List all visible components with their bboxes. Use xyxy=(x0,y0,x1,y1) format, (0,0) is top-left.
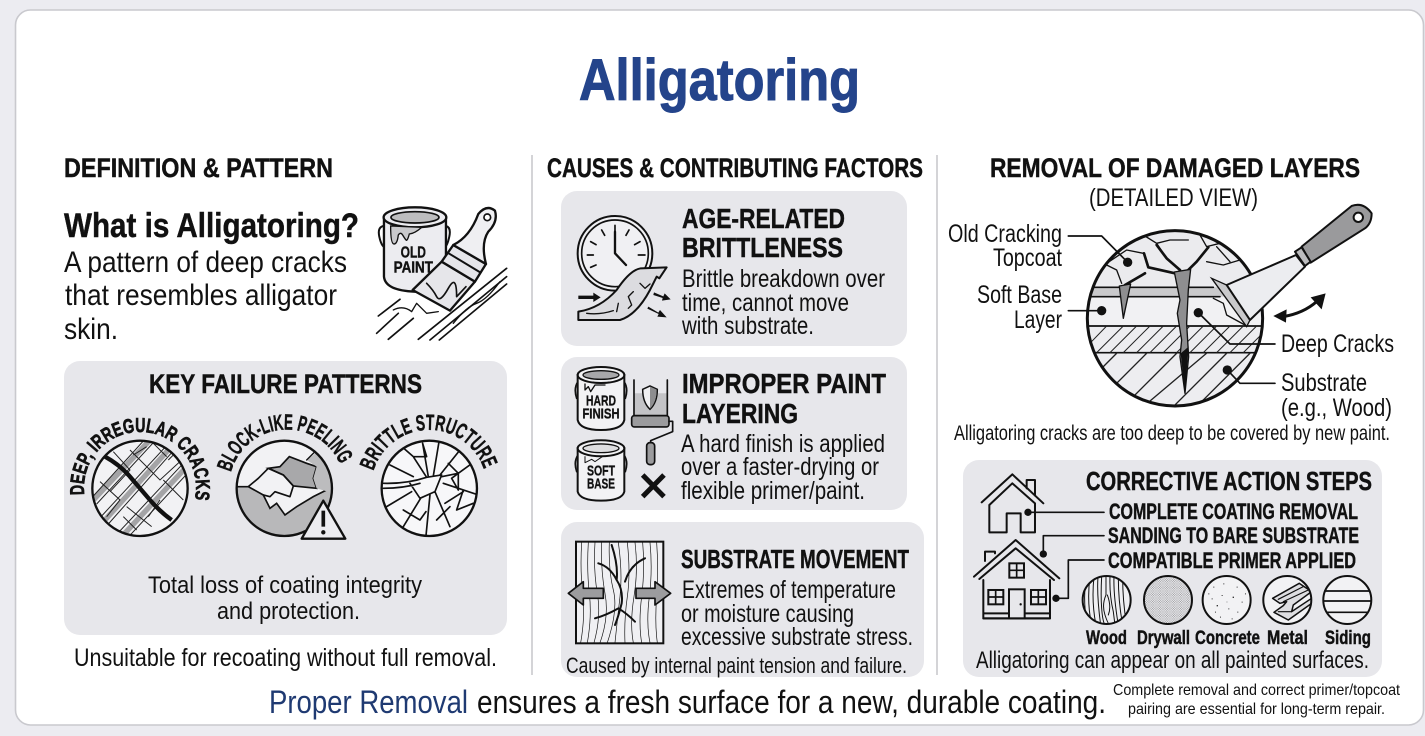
icon: scraper tool xyxy=(1227,205,1372,320)
icon: hard finish and soft base cans with roller: SOFT xyxy=(587,464,615,480)
surface material labels: Siding xyxy=(1325,628,1371,649)
icon: old paint can and brush: PAINT xyxy=(394,259,434,276)
heading: removal of damaged layers: REMOVAL OF DAMAGED LAYERS xyxy=(990,153,1360,183)
footer small note: Complete removal and correct primer/topcoat xyxy=(1113,682,1400,699)
icon: deep irregular cracks circle xyxy=(92,437,190,541)
curved label: block-like peeling: BLOCK-LIKE PEELING xyxy=(216,414,352,472)
diagram: cross-section of cracks and scraper xyxy=(1068,205,1372,410)
heading: key failure patterns: KEY FAILURE PATTERNS xyxy=(149,369,422,399)
icon: siding xyxy=(1322,576,1373,624)
title: Alligatoring xyxy=(579,48,860,113)
curved label: brittle structure: BRITTLE STRUCTURE xyxy=(359,414,498,470)
definition text block: skin. xyxy=(64,313,118,346)
description: age-related brittleness: Brittle breakdown over xyxy=(682,265,885,293)
surface material labels: Drywall xyxy=(1137,628,1190,649)
note: caused by internal paint tension: Caused by internal paint tension and failure. xyxy=(566,653,907,678)
diagram labels: Topcoat xyxy=(993,244,1062,272)
icon: houses with connector lines xyxy=(974,474,1104,618)
panel: improper paint layering xyxy=(561,357,907,510)
panel: key failure patterns xyxy=(64,361,507,635)
heading: age-related brittleness: BRITTLENESS xyxy=(682,232,843,263)
icon: block-like peeling circle xyxy=(235,440,345,540)
panel: corrective action steps xyxy=(963,460,1382,677)
icon: drywall xyxy=(1144,576,1192,624)
diagram labels: Substrate xyxy=(1281,369,1367,397)
heading: improper paint layering: IMPROPER PAINT xyxy=(682,368,886,399)
diagram labels: Deep Cracks xyxy=(1281,330,1394,358)
column: definition and pattern xyxy=(64,153,507,346)
icon: concrete xyxy=(1203,576,1251,624)
surface material labels: Wood xyxy=(1086,628,1127,649)
curved label: deep irregular cracks: DEEP, IRREGULAR CRACKS xyxy=(70,418,210,500)
heading: age-related brittleness xyxy=(682,203,845,263)
icon: brittle structure circle xyxy=(382,440,478,536)
description: substrate movement: Extremes of temperature xyxy=(682,576,896,604)
description: improper paint layering: A hard finish is applied xyxy=(681,430,885,458)
icon: hard finish and soft base cans with roller xyxy=(575,367,673,501)
surface material labels: Concrete xyxy=(1195,628,1260,649)
action steps list xyxy=(1108,499,1359,573)
description: substrate movement xyxy=(681,576,913,651)
surface material icons xyxy=(1083,576,1373,625)
leader lines xyxy=(1068,236,1275,383)
heading: causes and contributing factors: CAUSES & CONTRIBUTING FACTORS xyxy=(547,153,923,183)
heading: removal of damaged layers xyxy=(990,153,1360,212)
diagram labels: (e.g., Wood) xyxy=(1281,394,1392,422)
icon: metal xyxy=(1263,576,1312,624)
description: age-related brittleness: with substrate. xyxy=(681,312,814,340)
icon: wood substrate with arrows xyxy=(568,542,671,643)
diagram labels: Old Cracking xyxy=(948,220,1062,248)
icon: scraping motion arrow xyxy=(1273,293,1326,323)
heading: improper paint layering xyxy=(682,368,886,429)
panel: age-related brittleness xyxy=(561,191,907,346)
definition text block xyxy=(64,207,359,346)
heading: age-related brittleness: AGE-RELATED xyxy=(682,203,845,234)
icon: old paint can and brush xyxy=(377,207,507,340)
icon: old paint can and brush: OLD xyxy=(401,244,426,261)
icon: hard finish and soft base cans with roller: FINISH xyxy=(582,406,620,422)
footer small note: pairing are essential for long-term repair. xyxy=(1128,701,1385,718)
surface material labels xyxy=(1086,628,1371,649)
definition text block: What is Alligatoring? xyxy=(64,207,359,245)
caption: total loss of coating integrity xyxy=(148,572,422,625)
description: improper paint layering: flexible primer/paint. xyxy=(681,477,865,505)
footer small note xyxy=(1113,682,1400,718)
icon: wood xyxy=(1083,576,1131,625)
description: substrate movement: or moisture causing xyxy=(681,600,854,628)
note: unsuitable for recoating: Unsuitable for recoating without full removal. xyxy=(74,644,497,672)
footer message xyxy=(269,684,1106,720)
description: improper paint layering xyxy=(681,430,885,505)
caption: total loss of coating integrity: and protection. xyxy=(217,598,360,625)
footer message: ensures a fresh surface for a new, durable coating. xyxy=(477,684,1106,720)
heading: removal of damaged layers: (DETAILED VIEW) xyxy=(1089,184,1258,212)
icon: hard finish and soft base cans with roller: HARD xyxy=(586,394,616,410)
diagram labels: Soft Base xyxy=(977,281,1062,309)
description: age-related brittleness xyxy=(681,265,885,340)
diagram labels xyxy=(948,220,1394,422)
icon: warning triangle xyxy=(302,501,345,539)
definition text block: A pattern of deep cracks xyxy=(64,246,347,279)
description: substrate movement: excessive substrate stress. xyxy=(681,623,913,651)
diagram labels: Layer xyxy=(1014,306,1062,334)
heading: improper paint layering: LAYERING xyxy=(682,398,798,429)
caption: total loss of coating integrity: Total loss of coating integrity xyxy=(148,572,422,599)
footer message: Proper Removal xyxy=(269,684,468,720)
panel: substrate movement xyxy=(561,522,924,678)
description: age-related brittleness: time, cannot move xyxy=(682,289,849,317)
definition text block: that resembles alligator xyxy=(65,279,337,312)
icon: hard finish and soft base cans with roller: BASE xyxy=(587,476,615,492)
surface material labels: Metal xyxy=(1267,628,1308,649)
heading: substrate movement: SUBSTRATE MOVEMENT xyxy=(681,544,909,574)
icon: clock and cracking paint xyxy=(578,216,671,320)
description: improper paint layering: over a faster-drying or xyxy=(681,453,879,481)
heading: definition and pattern: DEFINITION & PATTERN xyxy=(64,153,333,183)
icon: x mark xyxy=(643,475,664,497)
